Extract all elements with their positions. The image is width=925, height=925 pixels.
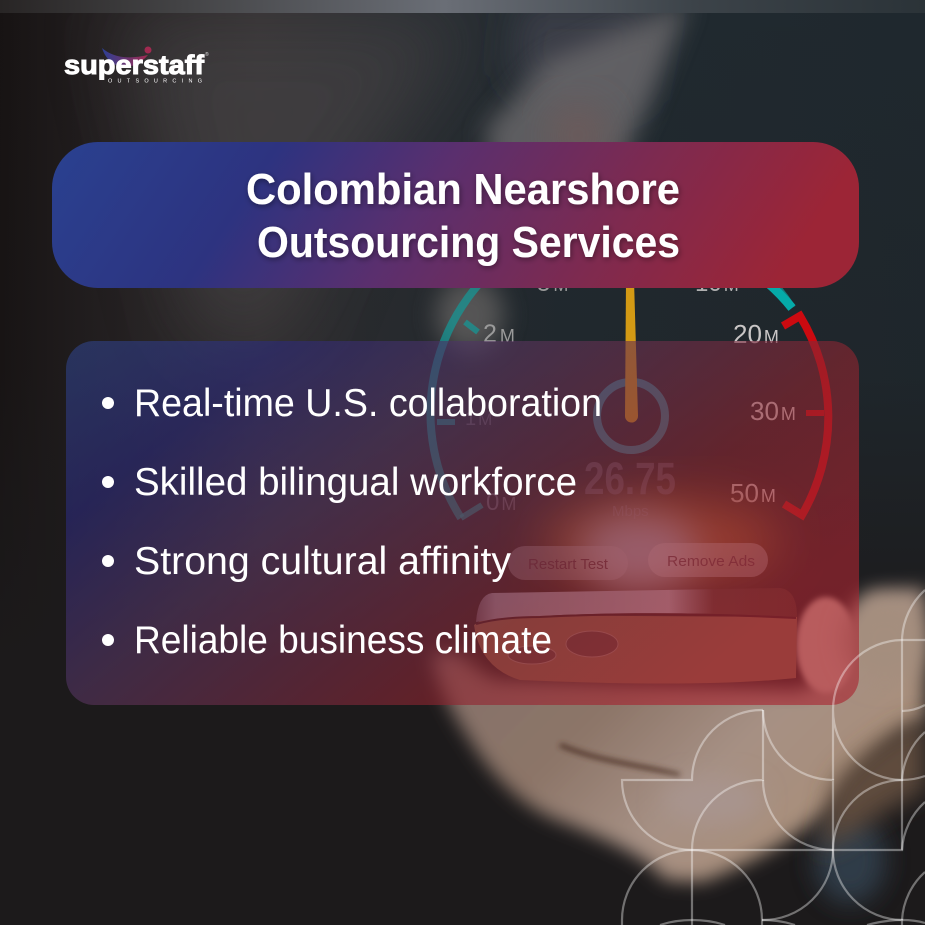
speed labels: 20M (733, 319, 779, 349)
speed labels (465, 270, 796, 516)
speed test gauge on phone screen (431, 217, 828, 518)
top light strip (0, 0, 925, 13)
title banner (52, 142, 859, 288)
logo: superstaff outsourcing (64, 46, 209, 84)
gauge ticks: left (437, 322, 482, 518)
logo tagline: OUTSOURCING (108, 78, 202, 84)
bullet list (102, 382, 602, 662)
screen buttons (508, 543, 768, 580)
speed labels: 2M (483, 320, 515, 348)
bullet list: Real-time U.S. collaboration (134, 382, 602, 425)
logo wordmark: superstaff (64, 50, 205, 80)
logo swoosh (102, 48, 148, 67)
title heading: Outsourcing Services (257, 218, 680, 267)
bullet list: Skilled bilingual workforce (134, 461, 577, 504)
speed labels: 1M (465, 408, 492, 430)
gauge needle (625, 280, 638, 422)
speed result reading: 26.75 (584, 453, 676, 504)
hand holding phone (432, 588, 925, 882)
phone camera lenses (508, 631, 618, 664)
screen buttons: Remove Ads (667, 553, 755, 570)
speed labels: 30M (750, 396, 796, 426)
logo registered mark: ® (205, 51, 209, 58)
gauge arc: teal left (431, 217, 792, 518)
gauge arc: red (783, 316, 828, 515)
speed labels: 50M (730, 478, 776, 508)
speed labels: 5M (537, 270, 568, 297)
gauge centre ring (597, 382, 665, 450)
bullet list: Strong cultural affinity (134, 540, 512, 583)
phone screen glow (540, 498, 780, 590)
speed result reading (584, 453, 676, 520)
speed result reading: Mbps (612, 503, 649, 520)
speed labels: 0M (486, 489, 516, 516)
decorative geometric line pattern (622, 590, 925, 925)
logo dot (144, 46, 152, 54)
speed labels: 10M (695, 270, 739, 297)
phone body (474, 588, 797, 684)
bullet list: Reliable business climate (134, 619, 552, 662)
screen buttons: Restart Test (528, 556, 609, 573)
gauge tick: 30M (806, 410, 824, 416)
title heading (246, 165, 680, 267)
gauge arc: teal right tip (768, 283, 792, 308)
panel: benefits list (66, 341, 859, 705)
title heading: Colombian Nearshore (246, 165, 680, 214)
